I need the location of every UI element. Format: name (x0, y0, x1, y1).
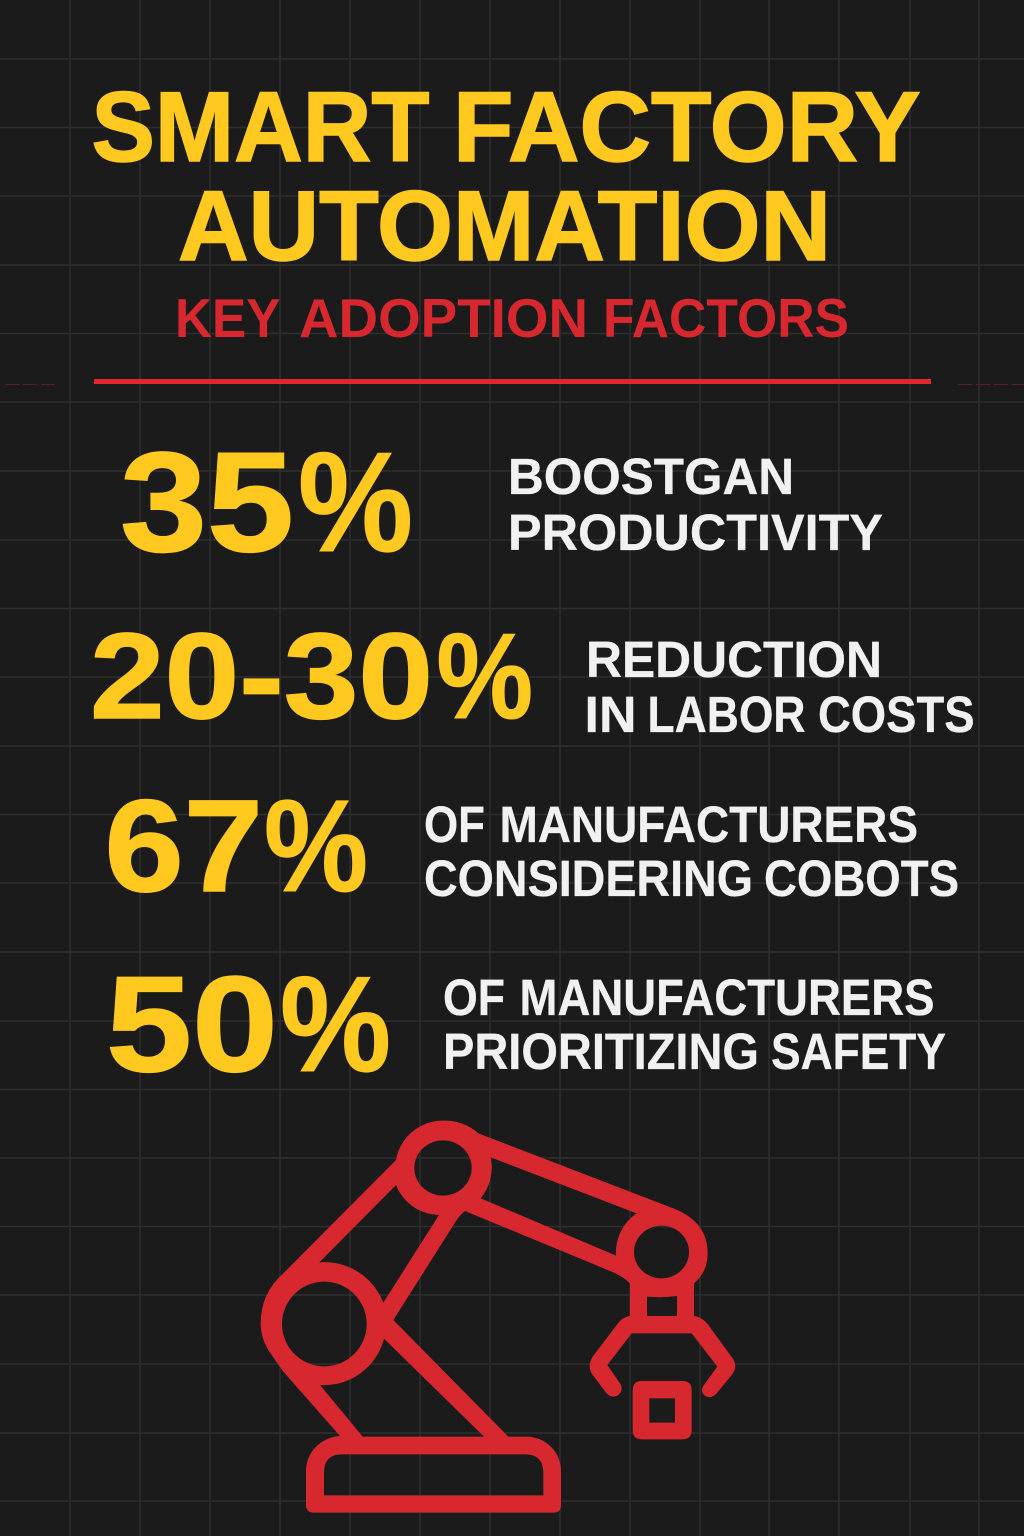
value: 35%: 35 (120, 423, 294, 582)
subtitle: KEY (175, 287, 280, 349)
label: of manufacturers prioritizing safety: MANUFACTURERS (520, 969, 934, 1026)
label: boostgan productivity: BOOSTGAN (508, 448, 794, 505)
divider line (94, 379, 931, 384)
value: 20-30%: 20-30 (90, 608, 433, 744)
label: of manufacturers prioritizing safety: SAFETY (771, 1023, 946, 1080)
value: 50%: 50 (106, 948, 278, 1100)
label: of manufacturers considering cobots (424, 796, 959, 907)
label: of manufacturers considering cobots: OF (424, 796, 485, 853)
label: reduction in labor costs (584, 631, 974, 743)
label: reduction in labor costs: COSTS (818, 686, 974, 743)
title (92, 71, 920, 281)
value: 50% (106, 948, 391, 1100)
stat: 35% boost productivity (120, 423, 883, 582)
label: boostgan productivity (508, 448, 883, 561)
label: of manufacturers considering cobots: CONSIDERING (424, 850, 753, 907)
stat: 20-30% labor costs (90, 608, 974, 744)
label: of manufacturers considering cobots: COBOTS (764, 850, 959, 907)
label: boostgan productivity: PRODUCTIVITY (508, 504, 883, 561)
value: 50%: % (280, 948, 391, 1100)
label: of manufacturers prioritizing safety (443, 969, 946, 1080)
label: reduction in labor costs: REDUCTION (586, 631, 882, 688)
stat: 67% cobots (104, 772, 959, 919)
label: reduction in labor costs: IN (584, 686, 636, 743)
icon: robot arm (261, 1121, 735, 1513)
title: SMART (92, 71, 430, 182)
value: 35%: % (298, 423, 413, 582)
value: 67%: 67 (104, 772, 263, 919)
label: of manufacturers prioritizing safety: OF (443, 969, 505, 1026)
stat: 50% safety (106, 948, 946, 1100)
value: 67% (104, 772, 368, 919)
subtitle: FACTORS (603, 287, 849, 349)
title: AUTOMATION (178, 170, 831, 281)
subtitle (175, 287, 849, 349)
subtitle: ADOPTION (299, 287, 588, 349)
value: 67%: % (264, 772, 368, 919)
title: FACTORY (453, 71, 920, 182)
label: of manufacturers considering cobots: MANUFACTURERS (500, 796, 918, 853)
value: 35% (120, 423, 413, 582)
value: 20-30%: % (436, 608, 533, 744)
label: reduction in labor costs: LABOR (648, 686, 806, 743)
label: of manufacturers prioritizing safety: PRIORITIZING (443, 1023, 759, 1080)
